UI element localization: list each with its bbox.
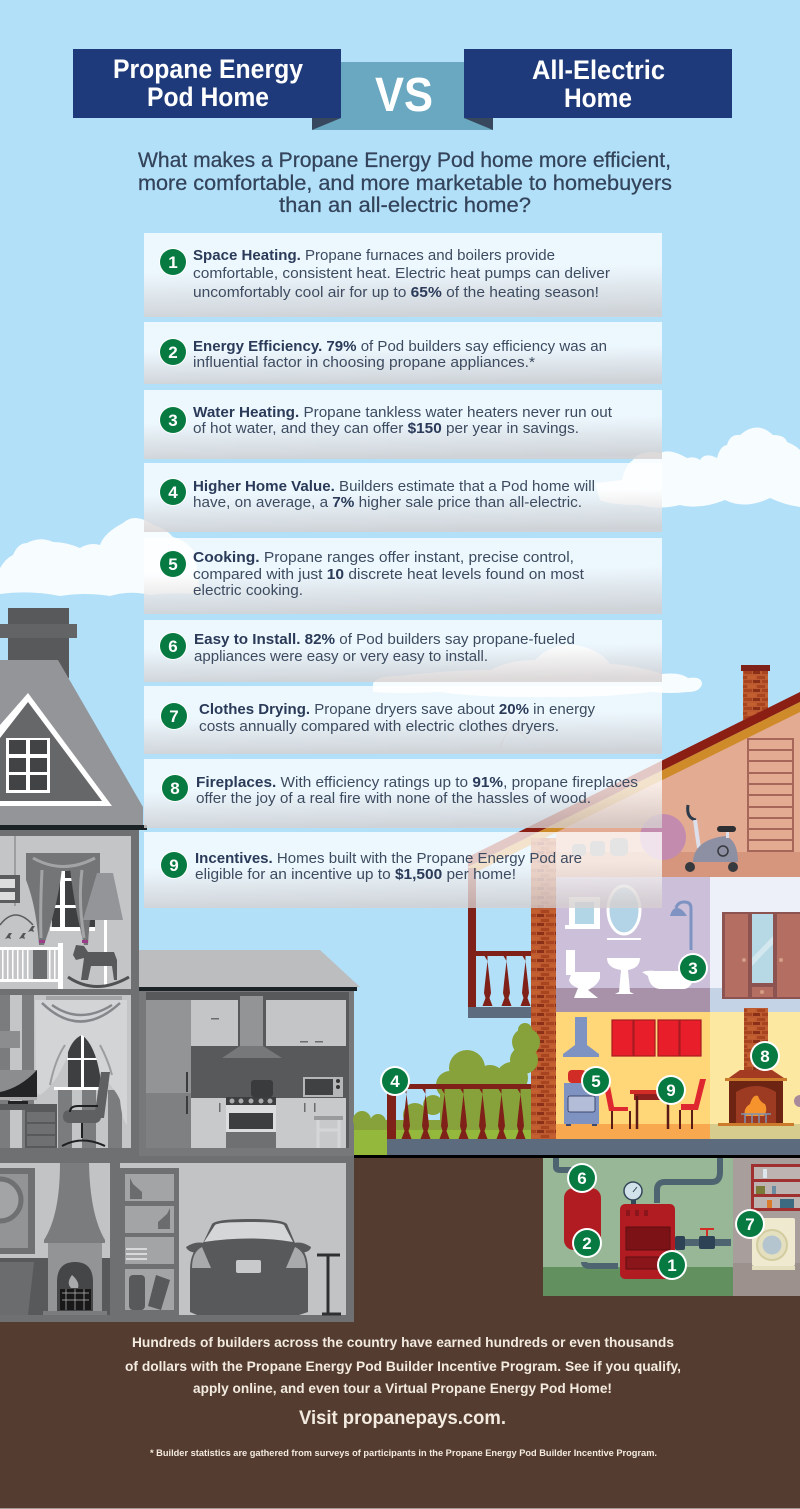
- panel 1: space heating: uncomfortably cool air for up to 65% of the heating season!: [193, 284, 599, 301]
- right house: attic: [468, 665, 800, 877]
- scene number badge 8: 8: [760, 1047, 770, 1066]
- bird silhouette: [500, 717, 527, 747]
- panel 7: clothes drying: costs annually compared with electric clothes dryers.: [199, 718, 559, 735]
- left house: chimney: [0, 608, 77, 678]
- cloud right: [595, 428, 800, 508]
- scene number badge 9: 9: [666, 1081, 676, 1100]
- closing call to action: Hundreds of builders across the country have earned hundreds or even thousands: [132, 1334, 674, 1350]
- scene number badge 8: [750, 1041, 780, 1071]
- balcony and porch post: [468, 868, 532, 1018]
- scene number badge 5: [581, 1066, 611, 1096]
- panel 9: incentives: Incentives. Homes built with the Propane Energy Pod are: [195, 850, 582, 867]
- panel 9: incentives: 9: [169, 856, 179, 875]
- panel 9: incentives: [144, 832, 662, 908]
- left house: roof with gable window: [0, 660, 147, 830]
- kitchen: [139, 991, 354, 1156]
- wing roof: [139, 950, 360, 991]
- deck railing: [387, 1084, 531, 1139]
- living room with brick fireplace: [710, 1008, 800, 1139]
- scene number badge 7: 7: [745, 1215, 755, 1234]
- panel 1: space heating: [144, 233, 662, 317]
- question heading: more comfortable, and more marketable to homebuyers: [138, 172, 672, 195]
- closing call to action: [125, 1334, 681, 1429]
- panel 3: water heating: 3: [168, 411, 178, 430]
- scene number badge 2: [572, 1228, 602, 1258]
- deck slab: [387, 1139, 800, 1155]
- living room with fireplace: [0, 1163, 110, 1315]
- panel 2: energy efficiency: influential factor in choosing propane appliances.*: [193, 354, 535, 371]
- panel 1: space heating: Space Heating. Propane furnaces and boilers provide: [193, 247, 555, 264]
- garage with shelves and car: [120, 1163, 346, 1315]
- panel 2: energy efficiency: 2: [168, 343, 178, 362]
- office room: [0, 995, 131, 1148]
- scene number badge 9: [656, 1075, 686, 1105]
- panel 9: incentives: eligible for an incentive up to $1,500 per home!: [195, 866, 516, 883]
- panel 5: cooking: compared with just 10 discrete heat levels found on most: [193, 566, 585, 583]
- panel 1: space heating: 1: [168, 253, 178, 272]
- title banner: All-Electric: [532, 55, 665, 85]
- ground: [0, 1155, 800, 1509]
- panel 6: easy to install: [144, 620, 662, 682]
- panel 6: easy to install: appliances were easy or very easy to install.: [194, 648, 488, 665]
- footnote: * Builder statistics are gathered from surveys of participants in the Propane Energy Pod Builder Incentive Program.: [150, 1448, 657, 1459]
- scene number badge 6: [567, 1163, 597, 1193]
- closing call to action: of dollars with the Propane Energy Pod Builder Incentive Program. See if you qualify,: [125, 1358, 681, 1374]
- panel 7: clothes drying: 7: [169, 707, 179, 726]
- scene number badge 6: 6: [577, 1169, 587, 1188]
- panel 4: higher home value: have, on average, a 7% higher sale price than all-electric.: [193, 494, 582, 511]
- title banner: Pod Home: [147, 82, 269, 112]
- panel 2: energy efficiency: Energy Efficiency. 79% of Pod builders say efficiency was an: [193, 338, 607, 355]
- panel 5: cooking: Cooking. Propane ranges offer instant, precise control,: [193, 549, 574, 566]
- panel 4: higher home value: Higher Home Value. Builders estimate that a Pod home will: [193, 478, 595, 495]
- question heading: [138, 149, 672, 217]
- panel 7: clothes drying: [144, 686, 662, 754]
- panel 6: easy to install: Easy to Install. 82% of Pod builders say propane-fueled: [194, 631, 575, 648]
- closing call to action: Visit propanepays.com.: [299, 1408, 506, 1429]
- panel 8: fireplaces: Fireplaces. With efficiency ratings up to 91%, propane fireplaces: [196, 774, 638, 791]
- bathroom: [556, 877, 710, 1012]
- basement laundry room: [733, 1158, 800, 1296]
- panel 6: easy to install: 6: [168, 637, 178, 656]
- scene number badge 4: [380, 1066, 410, 1096]
- kitchen and dining room: [556, 1012, 710, 1139]
- left house: wall structure: [0, 830, 354, 1322]
- title banner: Home: [564, 83, 632, 113]
- garden with bushes and lawn: [353, 1023, 540, 1155]
- question heading: than an all-electric home?: [279, 194, 531, 217]
- question heading: What makes a Propane Energy Pod home more efficient,: [138, 149, 671, 172]
- panel 5: cooking: electric cooking.: [193, 582, 303, 599]
- panel 8: fireplaces: offer the joy of a real fire with none of the hassles of wood.: [196, 790, 591, 807]
- panel 5: cooking: 5: [168, 555, 178, 574]
- brick column: [531, 838, 556, 1139]
- panel 1: space heating: comfortable, consistent heat. Electric heat pumps can deliver: [193, 265, 610, 282]
- basement utility room: [543, 1158, 733, 1296]
- panel 8: fireplaces: [144, 759, 662, 828]
- panel 4: higher home value: [144, 463, 662, 532]
- panel 4: higher home value: 4: [168, 483, 178, 502]
- scene number badge 1: 1: [667, 1256, 677, 1275]
- bedroom with wardrobe: [710, 877, 800, 1012]
- closing call to action: apply online, and even tour a Virtual Propane Energy Pod Home!: [193, 1380, 612, 1396]
- title banner: Propane Energy: [113, 54, 303, 84]
- panel 7: clothes drying: Clothes Drying. Propane dryers save about 20% in energy: [199, 701, 595, 718]
- panel 2: energy efficiency: [144, 322, 662, 384]
- panel 3: water heating: Water Heating. Propane tankless water heaters never run out: [193, 404, 613, 421]
- panel 3: water heating: [144, 390, 662, 459]
- scene number badge 3: [678, 953, 708, 983]
- cloud left: [0, 518, 200, 596]
- cloud centre: [373, 645, 702, 697]
- title banner: [73, 49, 732, 130]
- scene number badge 2: 2: [582, 1234, 592, 1253]
- scene number badge 5: 5: [591, 1072, 601, 1091]
- panel 5: cooking: [144, 538, 662, 614]
- panel 3: water heating: of hot water, and they can offer $150 per year in savings.: [193, 420, 579, 437]
- nursery room: [0, 836, 131, 989]
- scene number badge 7: [735, 1209, 765, 1239]
- sky background: [0, 0, 800, 1160]
- scene number badge 4: 4: [390, 1072, 400, 1091]
- scene number badge 1: [657, 1250, 687, 1280]
- title banner: VS: [375, 69, 433, 122]
- scene number badge 3: 3: [688, 959, 698, 978]
- panel 8: fireplaces: 8: [170, 779, 180, 798]
